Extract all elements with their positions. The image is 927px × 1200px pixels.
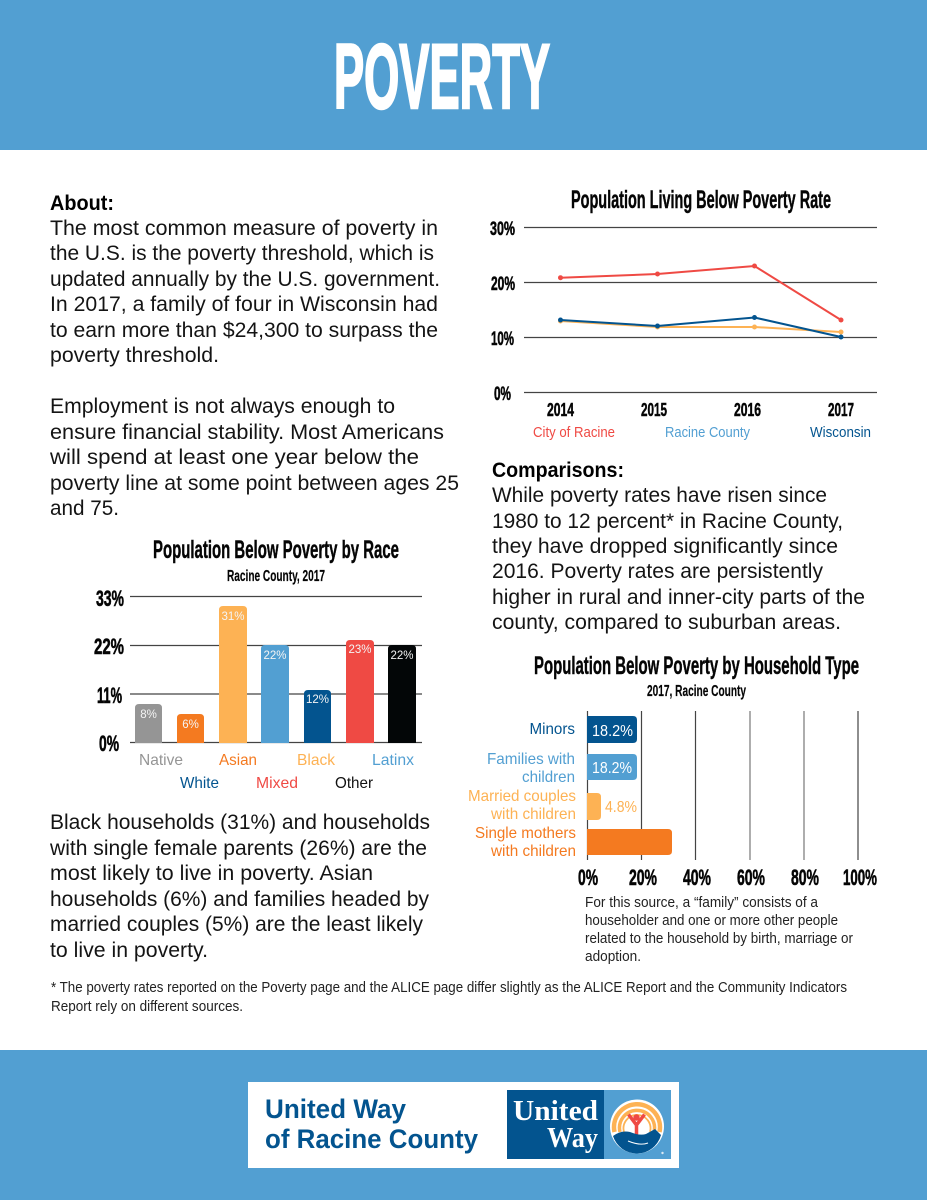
bar chart: population below poverty by household type [468,652,877,965]
organization name: of Racine County [265,1124,478,1154]
race legend labels: White [180,775,219,792]
footer band [0,1050,927,1200]
text block: employment: ensure financial stability. Most Americans [50,420,444,444]
text block: employment: Employment is not always enough to [50,394,395,418]
text block: about: updated annually by the U.S. government. [50,267,440,291]
x axis labels: 100% [843,865,877,890]
chart note: householder and one or more other people [585,913,838,929]
category labels: Minors [530,721,575,738]
bars [135,606,416,743]
chart subtitle: 2017, Racine County [647,683,746,700]
chart note [585,895,853,965]
text block: about: In 2017, a family of four in Wisconsin had [50,292,438,316]
header band with title: POVERTY [334,26,550,128]
category labels [468,721,576,860]
line: wisconsin [558,315,844,340]
chart title: Population Below Poverty by Race [153,536,399,564]
text block: employment: poverty line at some point between ages 25 [50,471,459,495]
chart note: related to the household by birth, marriage or [585,931,853,947]
race legend labels: Other [335,775,374,792]
text block: about: to earn more than $24,300 to surpass the [50,318,438,342]
text block: black households: to live in poverty. [50,938,208,962]
text block: employment: and 75. [50,496,119,520]
bars: 6% [182,719,199,731]
x axis labels: 40% [683,865,711,890]
line chart legend: Racine County [665,425,751,441]
text block: about [50,192,440,367]
bars: 31% [221,611,245,623]
y axis labels: 20% [491,274,515,295]
x axis years [547,399,854,420]
footnote: * The poverty rates reported on the Poverty page and the ALICE page differ slightly as the ALICE Report and the Community Indicators [51,980,847,996]
text block: employment [49,394,459,520]
line: racine county [558,318,844,334]
x axis years: 2017 [828,399,854,420]
bars: 23% [348,644,372,656]
white logo panel [248,1082,679,1168]
x axis labels: 60% [737,865,765,890]
organization name: United Way [265,1094,406,1124]
text block: about: The most common measure of poverty in [50,216,438,240]
horizontal bars [587,716,672,855]
text block: comparisons: they have dropped significantly since [492,534,838,558]
chart note: For this source, a “family” consists of a [585,895,819,911]
bars: 8% [140,709,157,721]
y axis labels: 11% [97,683,122,708]
y axis labels: 10% [491,329,514,350]
text block: about: About: [50,192,114,215]
footnote [51,980,847,1015]
bars: 22% [263,650,287,662]
x axis labels: 80% [791,865,819,890]
race legend labels: Latinx [372,752,414,769]
y axis labels [490,219,515,405]
text block: black households: Black households (31%) and households [50,810,430,834]
text block: black households: with single female parents (26%) are the [49,836,427,860]
race legend labels: Asian [219,752,257,769]
text block: black households: households (6%) and families headed by [50,887,429,911]
line chart legend: Wisconsin [810,425,871,441]
text block: employment: will spend at least one year below the [49,445,419,469]
text block: comparisons: Comparisons: [492,459,624,482]
category labels: with children [490,843,576,860]
text block: comparisons: 2016. Poverty rates are persistently [492,559,823,583]
text block: comparisons [492,459,865,634]
icon: united way logo: United [513,1095,598,1127]
x axis labels [578,865,877,890]
horizontal bars: 18.2% [592,760,632,777]
y axis labels [94,586,124,756]
footnote: Report rely on different sources. [51,999,243,1015]
text block: comparisons: While poverty rates have risen since [492,483,827,507]
chart note: adoption. [585,949,641,965]
x axis years: 2016 [734,399,761,420]
y axis labels: 0% [99,731,119,756]
race legend labels: Native [139,752,183,769]
race legend labels: Mixed [256,775,298,792]
text block: black households: married couples (5%) are the least likely [50,912,423,936]
category labels: Single mothers [475,825,576,842]
category labels: with children [490,806,576,823]
bars: 22% [390,650,414,662]
category labels: Married couples [468,788,576,805]
icon: united way logo [507,1090,671,1159]
category labels: children [522,769,575,786]
text block: comparisons: higher in rural and inner-city parts of the [492,585,865,609]
text block: black households: most likely to live in poverty. Asian [50,861,373,885]
line chart: population living below poverty rate [490,186,877,441]
header band with title [0,0,927,150]
text block: comparisons: county, compared to suburban areas. [492,610,841,634]
text block: about: poverty threshold. [50,343,219,367]
icon: united way logo: Way [547,1122,598,1154]
horizontal bars: 4.8% [605,799,637,816]
text block: about: the U.S. is the poverty threshold, which is [50,241,434,265]
bars: 12% [306,694,329,706]
line chart legend [533,425,871,441]
text block: comparisons: 1980 to 12 percent* in Racine County, [492,509,843,533]
line chart legend: City of Racine [533,425,615,441]
category labels: Families with [487,751,575,768]
bar chart: population below poverty by race [94,536,422,792]
race legend labels [139,752,414,792]
race legend labels: Black [297,752,336,769]
x axis years: 2015 [641,399,667,420]
y axis labels: 30% [490,219,515,240]
x axis labels: 0% [578,865,598,890]
text block: black households [49,810,430,962]
chart subtitle: Racine County, 2017 [227,568,325,585]
organization name [265,1094,478,1154]
x axis labels: 20% [629,865,657,890]
line: city of racine [558,264,844,322]
horizontal bars: 18.2% [592,723,633,740]
y axis labels: 22% [94,634,124,659]
x axis years: 2014 [547,399,574,420]
y axis labels: 33% [96,586,124,611]
y axis labels: 0% [494,384,511,405]
